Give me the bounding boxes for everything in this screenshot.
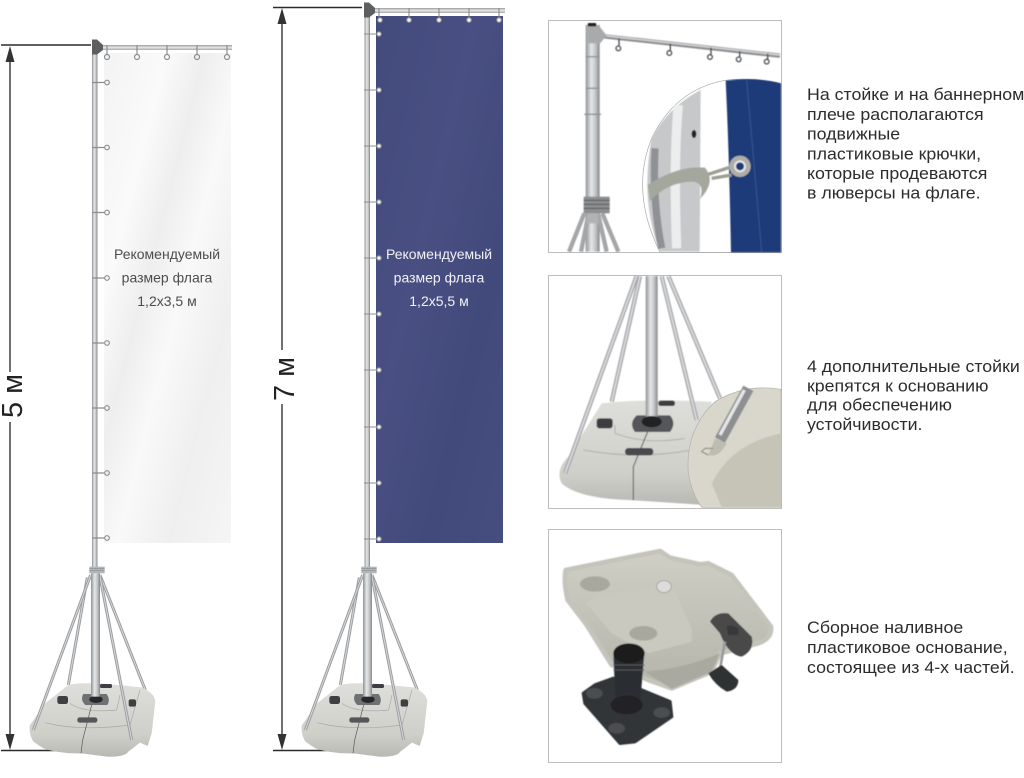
vertical mast	[586, 25, 600, 252]
panel: plastic base photo	[548, 530, 782, 762]
text block: plastic base: пластиковое основание,	[807, 638, 1008, 657]
back struts	[612, 276, 720, 402]
text block: hooks: которые продеваются	[807, 164, 987, 183]
pole cap	[92, 40, 103, 54]
magnifier circle	[643, 79, 781, 252]
text block: hooks: подвижные	[807, 124, 900, 143]
base with support struts	[30, 567, 155, 757]
text block: hooks: в люверсы на флаге.	[807, 183, 981, 202]
text block: hooks: пластиковые крючки,	[807, 144, 981, 163]
flag size label: размер флага	[122, 270, 213, 286]
text block: support struts: крепятся к основанию	[807, 376, 989, 395]
text block: support struts: устойчивости.	[807, 414, 922, 434]
flag size label: размер флага	[394, 270, 485, 286]
text block: hooks: плече располагаются	[807, 105, 984, 124]
flag size label: 1,2х5,5 м	[409, 293, 469, 309]
wire clamp and tripod legs	[569, 197, 618, 252]
navy flag	[376, 16, 503, 543]
text block: plastic base: Сборное наливное	[807, 618, 963, 637]
flag size label: Рекомендуемый	[386, 246, 492, 262]
dimension: 5 m	[0, 45, 100, 750]
banner arm	[375, 8, 505, 13]
banner arm	[103, 45, 232, 50]
text block: support struts: для обеспечению	[807, 395, 952, 414]
flag size label: 1,2х3,5 м	[137, 293, 197, 309]
hooks	[364, 8, 501, 541]
text block: hooks: На стойке и на баннерном	[807, 85, 1024, 104]
dark cap and plug	[708, 613, 752, 692]
panel: support struts photo	[548, 276, 782, 508]
hooks	[92, 45, 230, 540]
text block: support struts: 4 дополнительные стойки	[807, 357, 1020, 376]
panel: hooks detail photo	[548, 20, 782, 252]
plastic base	[559, 276, 712, 505]
pole cap	[364, 2, 375, 18]
black pipe flange	[583, 643, 672, 743]
right stand: 7 m flagpole	[269, 2, 505, 757]
dimension: 7 m: 7 м	[269, 357, 301, 401]
base with support struts	[302, 567, 427, 757]
text block: plastic base: состоящее из 4-х частей.	[807, 658, 1015, 677]
pole	[364, 12, 370, 570]
flag size label: Рекомендуемый	[114, 246, 220, 262]
magnifier detail	[688, 388, 781, 507]
dimension: 7 m	[269, 8, 372, 750]
pole	[92, 50, 98, 570]
top arm with hooks	[586, 23, 780, 64]
water tank	[565, 551, 771, 689]
left stand: 5 m flagpole	[0, 40, 232, 757]
white flag	[104, 53, 231, 543]
